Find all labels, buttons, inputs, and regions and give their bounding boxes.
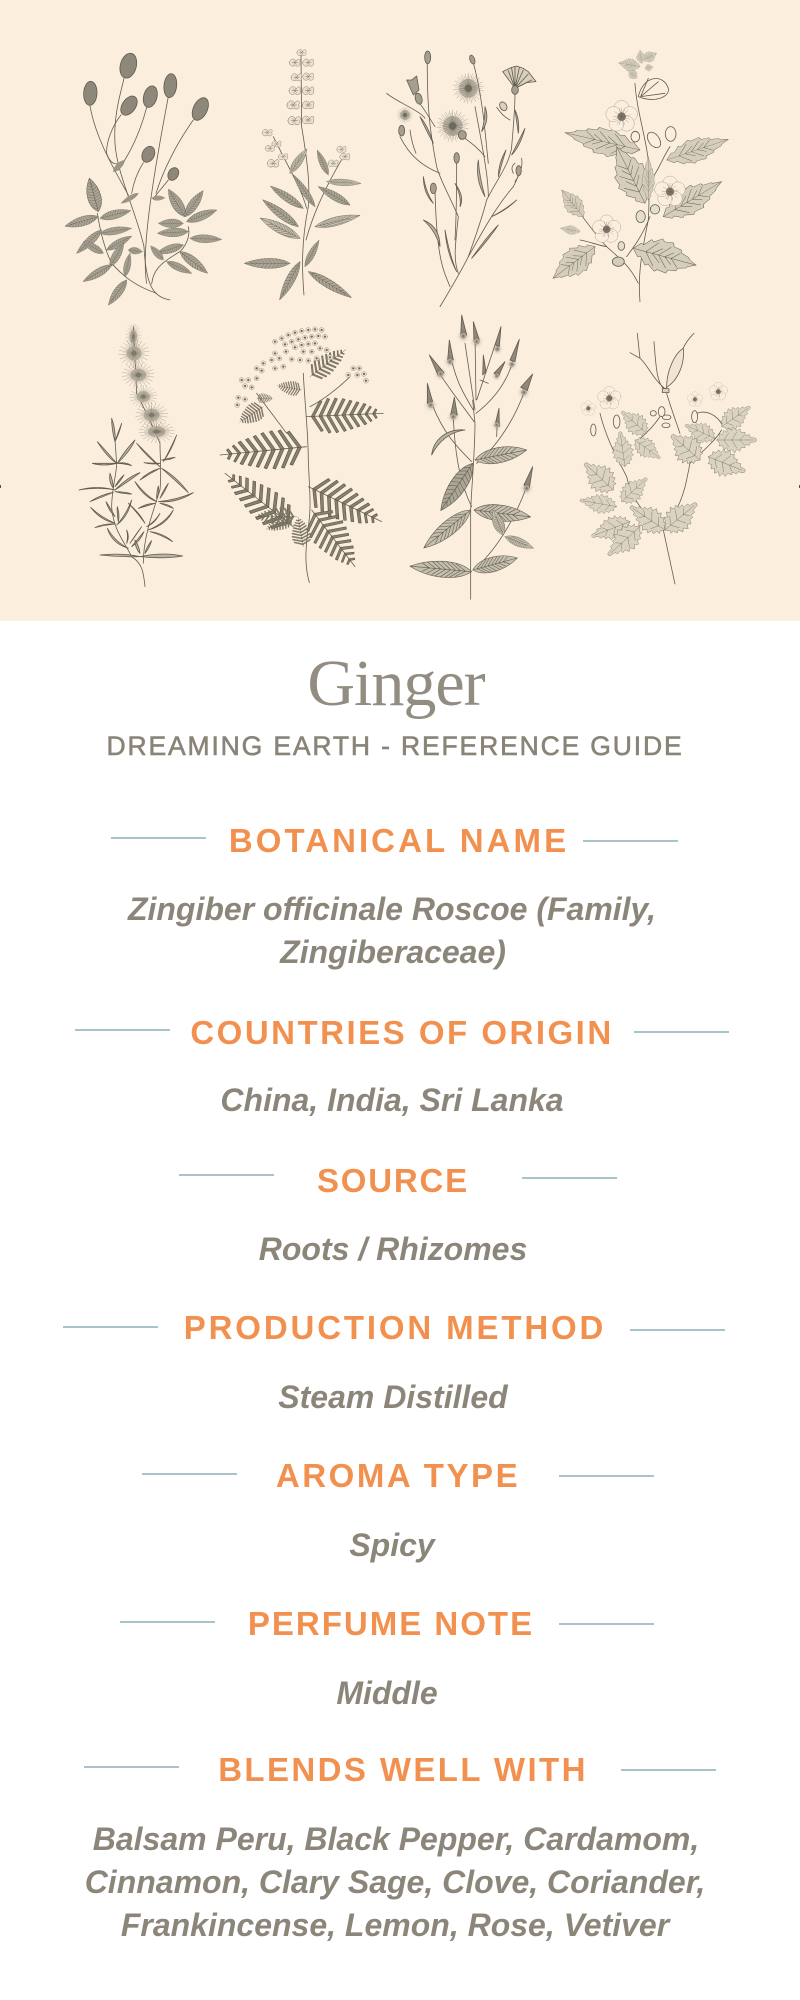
divider right <box>559 1475 654 1477</box>
divider right <box>621 1769 716 1771</box>
value line 3: Frankincense, Lemon, Rose, Vetiver <box>121 1907 669 1943</box>
value line 2: Zingiberaceae) <box>280 934 506 970</box>
divider right <box>634 1031 729 1033</box>
value: Middle <box>336 1675 438 1711</box>
plant: celandine with lobed leaves <box>575 333 757 584</box>
plant: mallow with broad leaves <box>544 48 732 302</box>
divider right <box>559 1623 654 1625</box>
value: Spicy <box>349 1527 435 1563</box>
heading: SOURCE <box>317 1162 469 1199</box>
heading: AROMA TYPE <box>276 1457 520 1494</box>
plant: hyssop with narrow leaves <box>79 324 193 587</box>
divider right <box>630 1329 725 1331</box>
heading: COUNTRIES OF ORIGIN <box>190 1014 614 1051</box>
title: Ginger <box>307 647 485 720</box>
divider right <box>522 1177 617 1179</box>
subtitle: DREAMING EARTH - REFERENCE GUIDE <box>106 731 684 761</box>
value line 2: Cinnamon, Clary Sage, Clove, Coriander, <box>85 1864 705 1900</box>
plant: burnet with oval seed heads <box>64 51 222 308</box>
background <box>0 0 800 621</box>
plant: tansy with feathery leaves <box>215 327 389 583</box>
section: source <box>179 1162 617 1267</box>
heading: PRODUCTION METHOD <box>184 1309 606 1346</box>
heading: PERFUME NOTE <box>248 1605 534 1642</box>
divider right <box>583 840 678 842</box>
banner: botanical illustrations <box>0 0 800 621</box>
section: botanical name <box>111 822 678 970</box>
divider left <box>84 1766 179 1768</box>
divider left <box>63 1326 158 1328</box>
value line 1: Zingiber officinale Roscoe (Family, <box>128 891 656 927</box>
section: production method <box>63 1309 725 1415</box>
section: blends well with <box>84 1751 716 1943</box>
divider left <box>120 1621 215 1623</box>
value: Roots / Rhizomes <box>259 1231 527 1267</box>
value: Steam Distilled <box>278 1379 508 1415</box>
divider left <box>142 1473 237 1475</box>
divider left <box>75 1029 170 1031</box>
plant: vervain with spikes <box>409 315 535 599</box>
divider left <box>179 1174 274 1176</box>
value line 1: Balsam Peru, Black Pepper, Cardamom, <box>93 1821 699 1857</box>
section: countries of origin <box>75 1014 729 1118</box>
divider left <box>111 837 206 839</box>
heading: BLENDS WELL WITH <box>218 1751 588 1788</box>
heading: BOTANICAL NAME <box>229 822 569 859</box>
plant: cornflower <box>387 51 536 307</box>
section: aroma type <box>142 1457 654 1563</box>
section: perfume note <box>120 1605 654 1711</box>
value: China, India, Sri Lanka <box>220 1082 564 1118</box>
plant: sage with flower spike <box>244 49 361 302</box>
